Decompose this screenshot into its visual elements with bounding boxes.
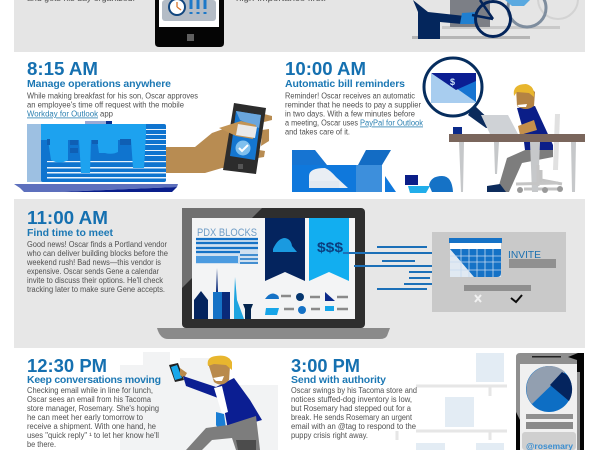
illustration: pancakes on a plate — [14, 121, 178, 192]
text: 11:00 body: who can deliver building blocks before the — [26, 249, 169, 258]
card: calendar invite — [432, 232, 566, 312]
icon: phone with clock — [155, 0, 224, 47]
background: faded shelves — [397, 353, 507, 450]
text: 8:15 body: While making breakfast for his son, Oscar approves — [27, 92, 198, 100]
text: 11:00 body: weekend rush! Bad news—this vendor is — [26, 258, 161, 267]
illustration: laptop with PDX Blocks page: $$$ — [317, 239, 343, 255]
illustration: open shipping box — [292, 150, 396, 192]
text: 3:00 body: but Rosemary had stepped out for a — [291, 404, 412, 413]
panel: 11:00 grey band — [14, 199, 585, 348]
text: 12:30 body: he can meet her early tomorrow to — [27, 413, 144, 422]
text: 8:15 body: an employee's time off request with the mobile — [27, 100, 185, 110]
text: 8:15 body — [27, 92, 198, 118]
heading: Send with authority: Send with authority — [291, 374, 386, 386]
heading: Keep conversations moving: Keep conversations moving — [27, 374, 161, 386]
heading: 3:00 PM: 3:00 PM — [291, 355, 360, 376]
text: 12:30 body — [27, 386, 159, 449]
heading: 11:00 AM: 11:00 AM — [27, 207, 108, 228]
text: 3:00 body: Oscar swings by his Tacoma store and — [291, 386, 417, 395]
text: 10:00 body: PayPal for Outlook — [360, 118, 424, 128]
text: clipped lines at top — [27, 0, 326, 3]
illustration: hand holding phone — [166, 103, 272, 174]
text: 10:00 body: in two days. With a few minutes before — [285, 110, 416, 118]
text: 3:00 body — [291, 386, 417, 440]
text: 3:00 body: notices stuffed-dog inventory is low, — [291, 395, 412, 404]
text: 10:00 body: and takes care of it. — [285, 128, 350, 136]
heading: 12:30 PM: 12:30 PM — [27, 355, 107, 376]
text: 12:30 body: uses "quick reply" ¹ to let her know he'll — [27, 431, 159, 440]
text: 11:00 body — [26, 240, 169, 294]
text: 8:15 body: app — [100, 110, 114, 118]
illustration: envelope in magnifying callout: $ — [450, 77, 455, 87]
card: calendar invite: INVITE — [508, 250, 541, 261]
text: 8:15 body: Workday for Outlook — [27, 110, 99, 118]
text: 10:00 body: reminder that he needs to pay a supplier — [285, 100, 421, 110]
text: 11:00 body: tracking later to make sure Gene accepts. — [27, 285, 165, 294]
text: 11:00 body: Good news! Oscar finds a Portland vendor — [27, 240, 167, 249]
illustration: laptop with PDX Blocks page — [157, 208, 390, 339]
illustration: person with bicycles — [412, 0, 578, 39]
illustration: small blocks — [405, 175, 453, 193]
illustration: Oscar at desk with laptop — [449, 84, 585, 193]
text: 12:30 body: Oscar sees an email from his Tacoma — [27, 395, 152, 404]
text: 3:00 body: puppy crisis right away. — [291, 431, 368, 440]
illustration: laptop with PDX Blocks page: PDX BLOCKS — [197, 227, 257, 239]
heading: 8:15 AM: 8:15 AM — [27, 58, 98, 79]
text: 12:30 body: store manager, Rosemary. She's hoping — [27, 404, 159, 413]
text: 12:30 body: Checking email while in line for lunch, — [27, 386, 153, 395]
heading: Automatic bill reminders: Automatic bill reminders — [285, 78, 405, 90]
icon: phone with @rosemary profile — [516, 353, 584, 450]
heading: Find time to meet: Find time to meet — [27, 227, 114, 239]
illustration: Oscar running with phone — [169, 356, 262, 450]
text: 12:30 body: receive a shipment. With one hand, he — [27, 422, 157, 431]
heading: 10:00 AM: 10:00 AM — [285, 58, 366, 79]
text: 11:00 body: expensive. Oscar sends Gene a calendar — [27, 267, 159, 276]
text: 12:30 body: be there. — [27, 440, 56, 449]
text: 3:00 body: email with an @tag to respond to the — [291, 422, 417, 431]
illustration: lines flying to invite — [343, 247, 447, 289]
panel: top grey band — [14, 0, 585, 52]
text: 11:00 body: invite to discuss their options. He'll check — [27, 276, 164, 285]
illustration: envelope in magnifying callout — [424, 58, 497, 128]
text: 10:00 body: a meeting, Oscar uses — [285, 118, 358, 128]
background: faded skyline — [120, 352, 278, 450]
text: 10:00 body — [285, 92, 424, 136]
text: 3:00 body: break. He sends Rosemary an urgent — [291, 413, 413, 422]
heading: Manage operations anywhere: Manage operations anywhere — [27, 78, 171, 90]
text: 10:00 body: Reminder! Oscar receives an automatic — [285, 92, 415, 100]
